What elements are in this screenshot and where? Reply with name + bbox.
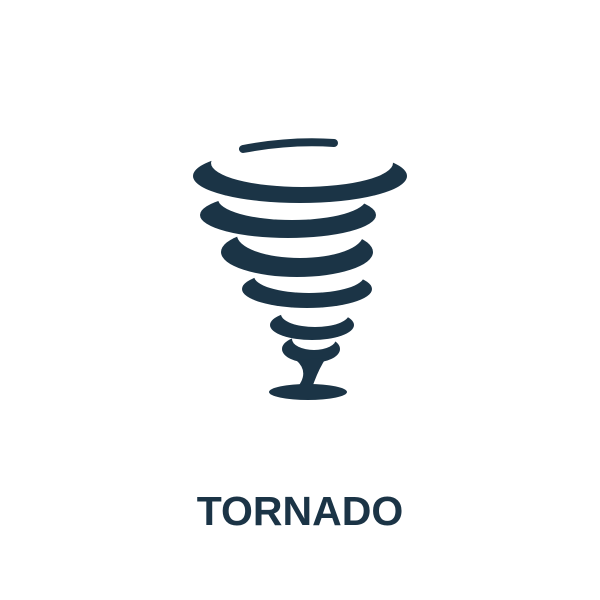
icon: tornado — [193, 138, 407, 400]
title: TORNADO — [197, 488, 403, 534]
base — [269, 384, 347, 400]
top bar — [243, 142, 334, 149]
tail — [296, 358, 326, 388]
